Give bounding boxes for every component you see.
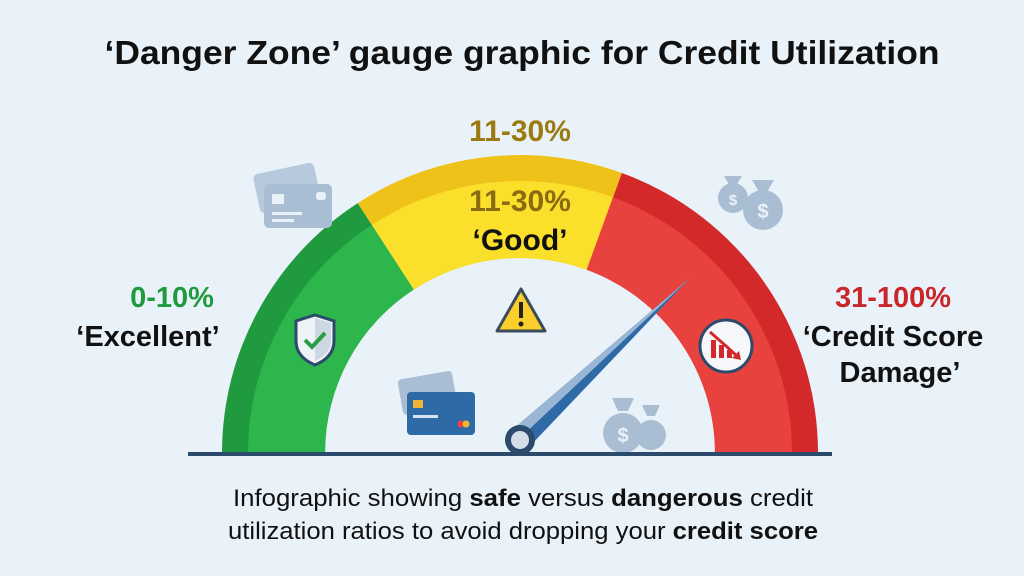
title: ‘Danger Zone’ gauge graphic for Credit Utilization [104,34,940,71]
icon: money bags bottom: $ [617,425,629,447]
caption: Infographic showing safe versus dangerous credit [233,485,813,512]
right label: Credit Score Damage: ‘Credit Score [803,321,983,353]
inner label: 11-30% Good [469,185,571,257]
top label: 11-30%: 11-30% [469,115,571,148]
caption [228,485,818,545]
icon: warning triangle [497,289,545,331]
inner label: 11-30% Good: 11-30% [469,185,571,218]
icon: money bags top-right: $ [757,201,769,223]
right label: Credit Score Damage [803,282,983,389]
right label: Credit Score Damage: Damage’ [840,357,960,389]
gauge [222,155,818,453]
icon: credit cards top-left [253,162,332,228]
inner label: 11-30% Good: ‘Good’ [473,224,567,257]
icon: money bags bottom [603,398,666,453]
baseline [188,452,832,456]
left label: Excellent: 0-10% [130,282,214,314]
left label: Excellent: ‘Excellent’ [76,321,220,353]
icon: credit card center [397,370,475,435]
icon: money bags top-right: $ [729,192,738,209]
icon: money bags top-right [718,176,783,230]
caption: utilization ratios to avoid dropping your credit score [228,518,818,545]
needle [505,278,690,455]
icon: declining chart circle [700,320,752,372]
icon: shield check [296,315,334,365]
left label: Excellent [76,282,220,353]
right label: Credit Score Damage: 31-100% [835,282,951,314]
